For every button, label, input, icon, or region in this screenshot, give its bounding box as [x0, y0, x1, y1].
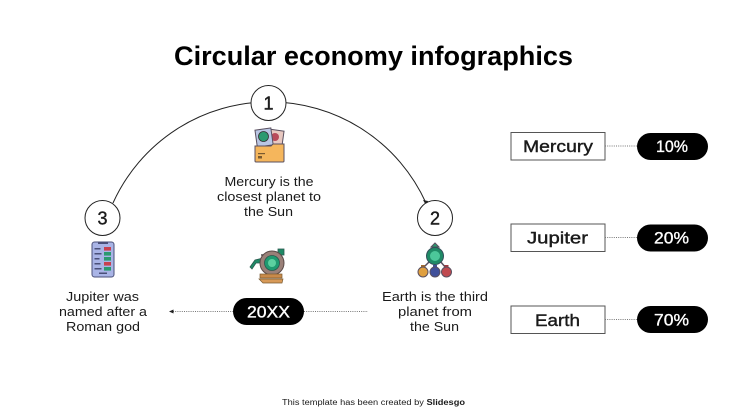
- text: step 1 description: closest planet to: [217, 190, 321, 204]
- text: step 2 description: Earth is the third: [382, 290, 488, 304]
- row: Mercury 10%: [511, 132, 708, 160]
- row: Jupiter 20%: [511, 224, 708, 252]
- arc connecting steps: [113, 102, 428, 206]
- label box: Mercury: Mercury: [523, 137, 594, 156]
- text: step 1 description: Mercury is the: [224, 175, 314, 189]
- label box: Mercury: [511, 132, 605, 160]
- text: step 3 description: named after a: [59, 305, 147, 319]
- title: Circular economy infographics: [174, 41, 573, 71]
- icon: folder with money: [255, 128, 284, 162]
- step 2 number: [418, 200, 452, 236]
- year pill: [233, 298, 304, 325]
- icon: hand, coin and stack: [250, 249, 284, 283]
- value pill: 20%: [637, 224, 708, 252]
- step 3 number: 3: [97, 208, 108, 228]
- text: step 2 description: planet from: [398, 305, 472, 319]
- icon: money tree: [418, 243, 452, 277]
- text: step 2 description: [382, 290, 488, 334]
- text: step 3 description: Jupiter was: [66, 290, 139, 304]
- value pill: 70%: [637, 306, 708, 333]
- label box: Earth: [511, 306, 605, 334]
- value pill: 70%: 70%: [654, 310, 689, 330]
- row: Earth 70%: [511, 306, 708, 334]
- text: step 1 description: the Sun: [244, 205, 293, 219]
- label box: Jupiter: [511, 224, 605, 252]
- step 3 number: [85, 200, 120, 236]
- year pill: 20XX: [247, 302, 290, 322]
- step 1 number: [251, 86, 286, 120]
- step 1 number: 1: [263, 94, 274, 114]
- label box: Jupiter: Jupiter: [527, 228, 588, 248]
- text: step 2 description: the Sun: [410, 320, 459, 334]
- icon: phone with stock list: [92, 242, 114, 277]
- label box: Earth: Earth: [535, 311, 580, 330]
- text: step 3 description: Roman god: [66, 320, 140, 334]
- dotted arrow pointing to step 3: [169, 310, 233, 314]
- dotted line from step 2: [304, 310, 368, 312]
- value pill: 10%: [637, 133, 708, 160]
- text: step 3 description: [59, 290, 147, 334]
- text: step 1 description: [217, 175, 321, 219]
- value pill: 20%: 20%: [654, 228, 689, 248]
- value pill: 10%: 10%: [656, 137, 688, 156]
- footer credit: This template has been created by Slidesgo: [282, 398, 465, 407]
- step 2 number: 2: [430, 208, 440, 228]
